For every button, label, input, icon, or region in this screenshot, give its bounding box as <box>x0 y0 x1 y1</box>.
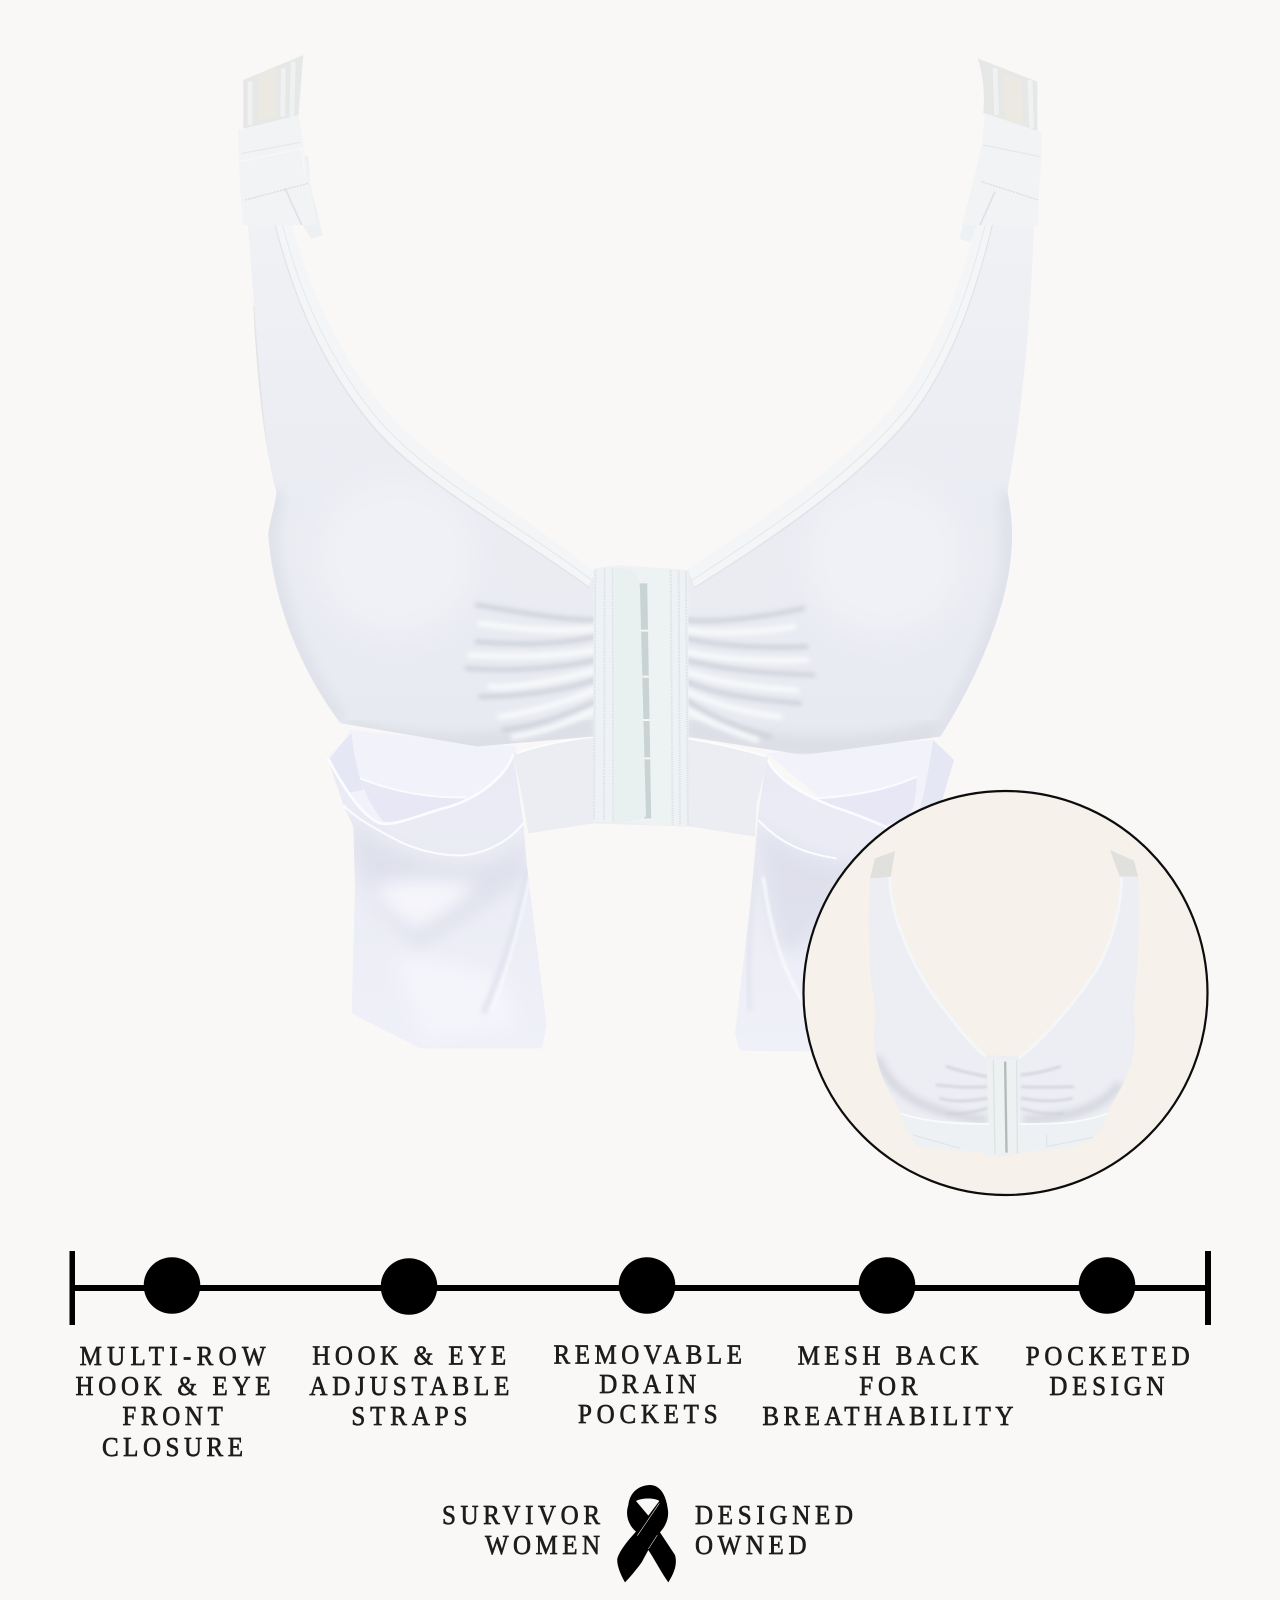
label: multi-row hook and eye front closure: HOOK & EYE <box>76 1371 270 1401</box>
timeline dot 1 <box>144 1257 200 1314</box>
right pocket <box>735 757 887 1052</box>
label: removable drain pockets <box>554 1340 742 1429</box>
label: hook and eye adjustable straps: HOOK & EYE <box>312 1341 506 1371</box>
hook slit <box>638 583 653 818</box>
gathered folds beside closure <box>467 605 813 740</box>
icon: awareness ribbon <box>617 1485 676 1582</box>
label: multi-row hook and eye front closure: FRONT <box>122 1401 223 1431</box>
label: pocketed design <box>1026 1341 1190 1401</box>
label: mesh back for breathability: FOR <box>859 1371 918 1401</box>
strap slider underlay <box>238 115 317 225</box>
inset bra <box>869 850 1139 1157</box>
footer text: survivor women: SURVIVOR <box>442 1500 601 1530</box>
inset closure <box>987 1058 1021 1156</box>
left placket <box>615 567 646 825</box>
footer text: survivor women: WOMEN <box>485 1530 600 1560</box>
left end cap <box>70 1251 75 1325</box>
right end cap <box>1205 1251 1211 1325</box>
timeline dot 3 <box>619 1257 675 1314</box>
right back strap piece <box>959 153 991 242</box>
label: hook and eye adjustable straps <box>309 1341 509 1431</box>
right back fabric edge <box>1005 305 1026 471</box>
footer text: designed owned <box>695 1500 853 1560</box>
label: multi-row hook and eye front closure: CLOSURE <box>102 1432 243 1462</box>
inset circle: alternate bra view <box>804 791 1208 1195</box>
label: hook and eye adjustable straps: STRAPS <box>351 1401 467 1431</box>
left pocket interior <box>327 730 517 827</box>
label: mesh back for breathability: BREATHABILITY <box>762 1401 1014 1431</box>
timeline dot 5 <box>1079 1257 1135 1314</box>
feature timeline <box>70 1251 1211 1325</box>
right pocket interior <box>767 740 954 830</box>
bra body with cups and neckline <box>246 196 1034 755</box>
label: hook and eye adjustable straps: ADJUSTABLE <box>309 1371 509 1401</box>
under-bust band <box>513 735 768 837</box>
cup highlights <box>316 478 477 637</box>
timeline line <box>70 1285 1211 1291</box>
label: removable drain pockets: DRAIN <box>599 1369 696 1399</box>
left strap top <box>238 55 317 225</box>
footer text: designed owned: OWNED <box>695 1530 807 1560</box>
timeline dot 2 <box>381 1258 437 1315</box>
right strap top <box>962 58 1042 225</box>
label: pocketed design: DESIGN <box>1049 1371 1165 1401</box>
cup edge shading <box>268 491 1010 736</box>
left back fabric edge <box>253 305 279 484</box>
label: mesh back for breathability: MESH BACK <box>798 1341 979 1371</box>
label: removable drain pockets: REMOVABLE <box>554 1340 742 1370</box>
inset folds <box>937 1067 1073 1114</box>
label: multi-row hook and eye front closure <box>76 1341 270 1462</box>
footer text: designed owned: DESIGNED <box>695 1500 853 1530</box>
left pocket <box>327 753 547 1048</box>
neckline binding <box>388 439 889 586</box>
front hook and eye closure <box>593 565 689 826</box>
label: mesh back for breathability <box>762 1341 1014 1431</box>
under-bust shadow <box>349 727 938 747</box>
footer text: survivor women <box>442 1500 601 1560</box>
label: pocketed design: POCKETED <box>1026 1341 1190 1371</box>
inset background circle <box>804 791 1208 1195</box>
label: multi-row hook and eye front closure: MULTI-ROW <box>80 1341 266 1371</box>
timeline dot 4 <box>859 1257 915 1314</box>
main product photo: front view of bra with drain pockets <box>238 55 1042 1052</box>
label: removable drain pockets: POCKETS <box>578 1399 718 1429</box>
stitched seams <box>594 568 688 825</box>
strap slider underlay <box>962 113 1042 225</box>
left back strap piece <box>284 153 323 239</box>
right placket <box>647 568 672 826</box>
hook ticks <box>639 631 652 758</box>
